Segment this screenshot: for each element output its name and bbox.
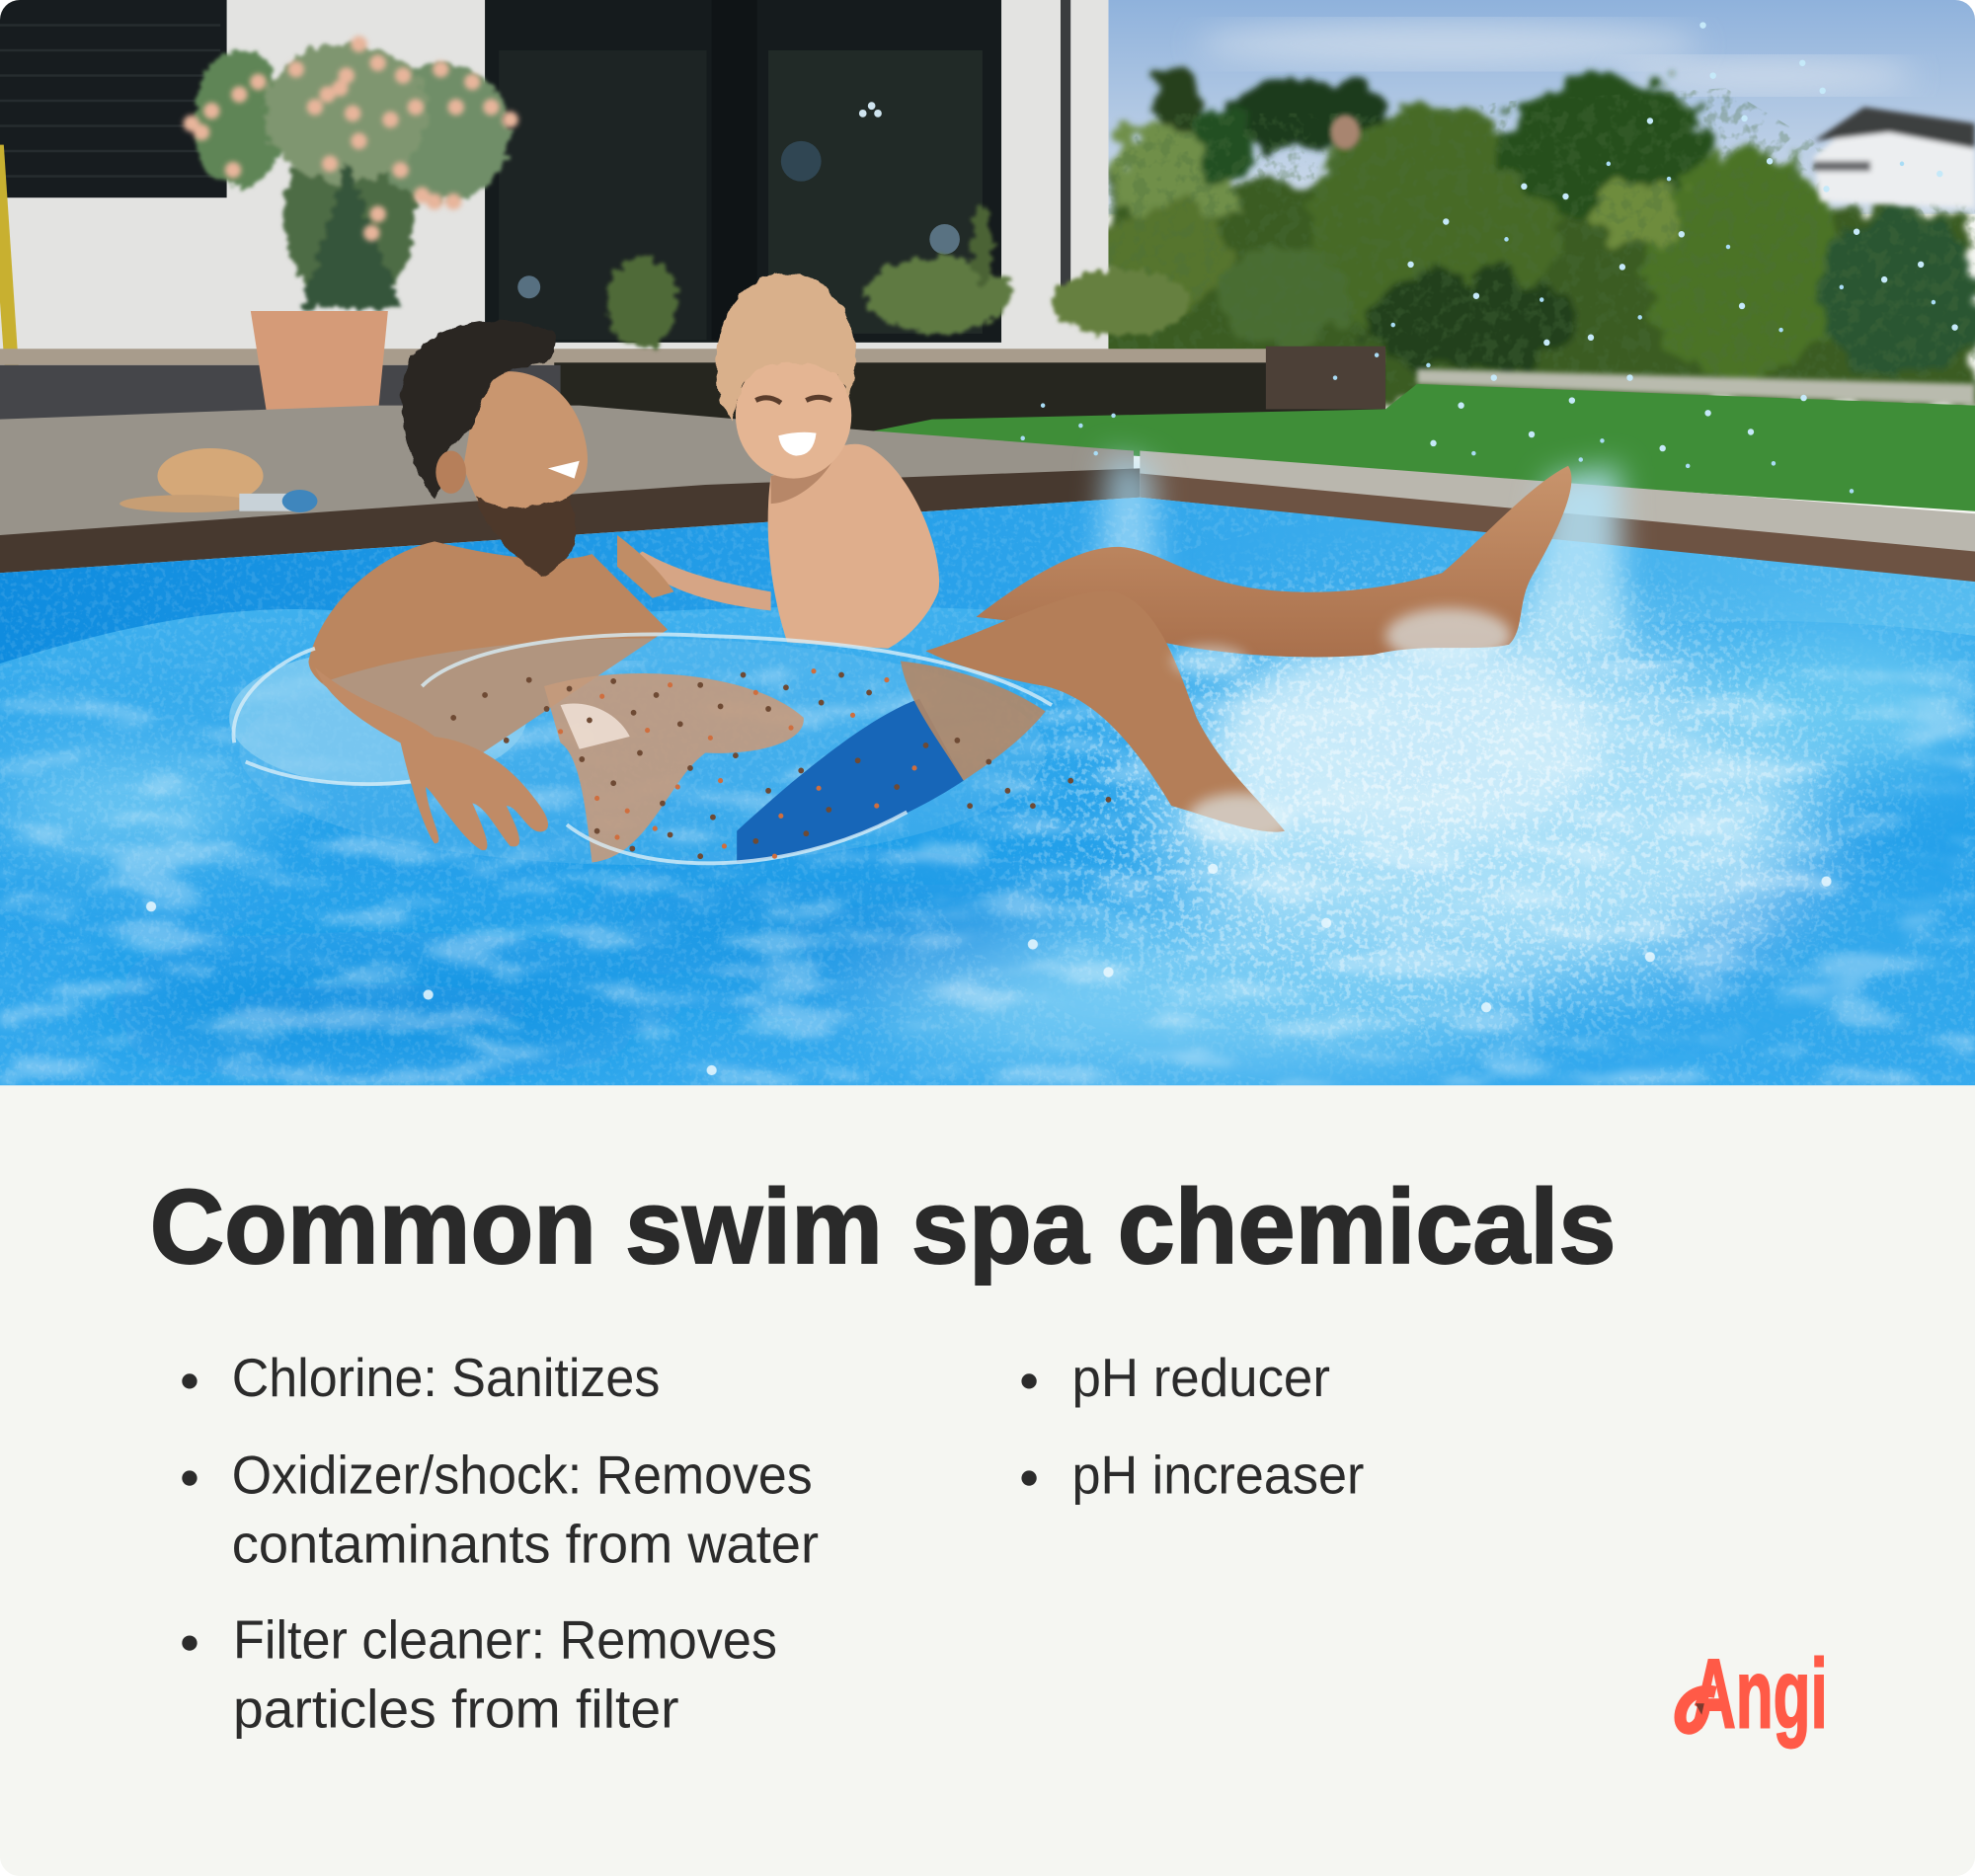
flying water droplets [151,26,1955,1070]
father: torso and arm [308,321,673,755]
child: hair [716,274,856,422]
right-hand splash [1096,453,1624,843]
ripple texture [0,661,1975,1085]
inflatable ring, far side [229,650,526,786]
drainpipe [1061,0,1070,302]
bullet: filter cleaner: Filter cleaner: Removes [233,1608,777,1670]
pool coping, left side [0,468,1140,573]
logo: Angi: Angi [1692,1640,1828,1750]
distant white house [1814,107,1975,207]
wooden deck [0,406,1134,539]
trees in the background [1108,74,1975,403]
bullet: filter cleaner [182,1608,777,1740]
sliding glass door [485,0,1001,343]
transparent ring with glitter [233,634,1108,865]
blue swim trunks seen through the ring [737,699,964,862]
child: smile [778,432,817,456]
bullet: oxidizer: contaminants from water [232,1513,819,1574]
splash washing over the feet and knee [1171,608,1512,843]
father: raised leg [977,466,1571,657]
father: bent leg [926,591,1285,832]
spray grain [0,504,1975,1085]
child: body [636,274,939,649]
glitter speckles [453,674,1108,856]
pool coping, right side [1140,451,1975,585]
child: eyes [755,397,831,403]
father's legs seen through the ring [544,673,804,862]
bullet: oxidizer: Oxidizer/shock: Removes [232,1444,813,1505]
father: smile [548,461,580,479]
father: hand resting in front of the ring [315,667,548,850]
panel: bottom text background [0,1085,1975,1876]
father: hair [402,321,557,498]
father: head [463,371,588,560]
potted plant with pink flowers [192,44,511,416]
ledge and planter wall [0,347,1385,438]
water surface [0,453,1975,1085]
dark window with blinds [0,0,227,197]
bulleted list: right column [1021,1347,1364,1505]
father: ear [435,451,466,494]
logo: Angi [1681,1640,1828,1750]
pool wall [0,498,1975,1085]
bullet: pH reducer: pH reducer [1071,1347,1330,1408]
father: beard [476,498,575,577]
sky [1108,0,1975,214]
photo: father and son splashing in a pool [0,0,1975,1085]
terracotta pot [251,311,388,416]
lawn [856,384,1975,511]
garden path [1417,369,1975,406]
bullet: filter cleaner: particles from filter [233,1679,679,1740]
bullet: oxidizer [182,1444,819,1574]
bullet: chlorine: Chlorine: Sanitizes [232,1347,660,1408]
sun hat and goggles [119,448,317,512]
house wall [0,0,1108,352]
child: head [736,352,851,479]
yellow pole [0,144,19,365]
title: Common swim spa chemicals [150,1167,1616,1286]
bullet: pH increaser: pH increaser [1071,1444,1364,1505]
small shrubs by the door [607,205,1190,348]
bulleted list: left column [182,1347,819,1740]
